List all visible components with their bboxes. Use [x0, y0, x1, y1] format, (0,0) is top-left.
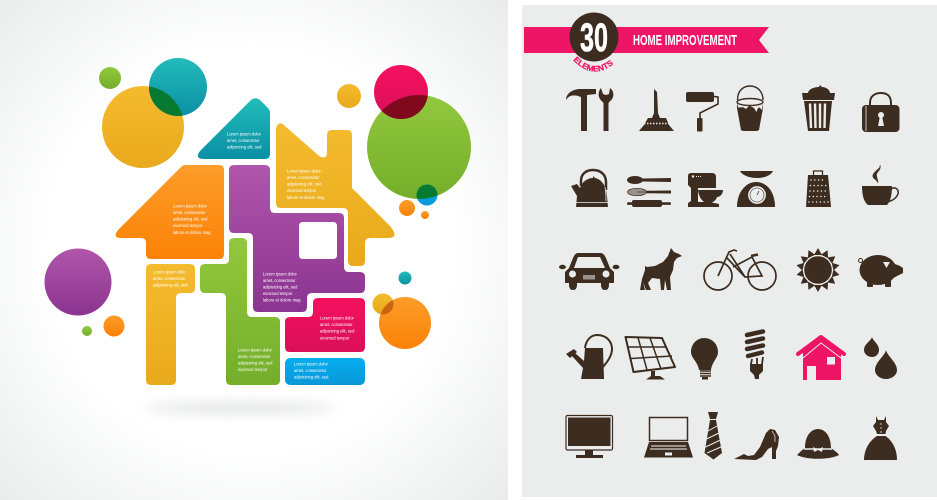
panel: green piece: adipisicing elit, sed [238, 360, 273, 366]
icon: energy saving bulb [747, 332, 763, 379]
panel: orange left roof piece: eiusmod tempor [173, 223, 203, 228]
panel: house infographic background [0, 0, 508, 500]
panel: teal roof piece: amet, consectetur [227, 138, 260, 143]
ribbon banner: HOME IMPROVEMENT [633, 32, 737, 49]
panel: purple piece with window: adipisicing elit, sed [263, 284, 298, 290]
icon: monitor [566, 416, 612, 458]
panel: green piece [200, 238, 280, 385]
panel: orange left roof piece: Lorem ipsum dolor [173, 204, 208, 208]
icon: wrench [599, 88, 613, 131]
decorative bubbles top left [99, 58, 207, 168]
icon: watering can [566, 335, 612, 379]
icon: solar panel [626, 337, 675, 380]
panel: teal roof piece: adipisicing elit, sed [227, 144, 262, 150]
panel: blue piece [285, 358, 365, 385]
icon: laptop [644, 418, 693, 458]
panel: green piece: eiusmod tempor [238, 367, 268, 372]
panel: pink piece: amet, consectetur [320, 322, 353, 327]
panel: orange left roof piece: adipisicing elit, sed [173, 216, 208, 222]
panel: yellow left wall piece: amet, consectetur [153, 276, 186, 281]
icon: sun [796, 248, 840, 292]
icon: dog [640, 248, 682, 290]
icon: necktie [704, 412, 722, 460]
icon: piggy bank [858, 255, 903, 287]
icon: broom [639, 89, 674, 131]
decorative bubbles bottom right [372, 272, 431, 349]
panel: pink piece: Lorem ipsum dolor [320, 316, 355, 320]
badge: 30 elements: ELEMENTS [573, 56, 613, 72]
panel: orange left roof piece: amet, consectetur [173, 210, 206, 215]
panel: yellow left wall piece: adipisicing elit, sed [153, 282, 188, 288]
icon: high heel shoe [734, 429, 779, 460]
panel: blue piece: amet, consectetur [294, 368, 327, 373]
decorative bubbles top right [337, 65, 471, 219]
panel: yellow right roof piece: adipisicing elit, sed [287, 182, 322, 186]
decorative bubbles left [44, 248, 124, 336]
icon: light bulb [691, 338, 718, 380]
icon: stand mixer [688, 173, 723, 207]
panel: orange left roof piece [116, 165, 224, 259]
panel: purple piece with window: eiusmod tempor [263, 291, 293, 296]
icon: kitchen utensils [627, 176, 671, 207]
icon: house (highlighted pink) [798, 337, 844, 380]
icon: dress [864, 416, 897, 460]
icon: kitchen scale [737, 171, 775, 207]
icon: hat [797, 429, 839, 459]
panel: purple piece with window: Lorem ipsum dolor [263, 272, 298, 276]
panel: teal roof piece [198, 98, 270, 159]
panel: yellow right roof piece: amet, consectetur [287, 175, 320, 180]
panel: purple piece with window [229, 165, 365, 312]
panel: yellow right roof piece: eiusmod tempor [287, 188, 317, 193]
panel: teal roof piece: Lorem ipsum dolor [227, 132, 262, 136]
badge: 30 elements: 30 [580, 16, 608, 60]
icon: water drops [864, 337, 897, 379]
panel: yellow right roof piece: Lorem ipsum dolor [287, 168, 322, 174]
icon: bicycle [704, 250, 776, 290]
icon: padlock [862, 93, 900, 132]
ribbon banner [524, 27, 769, 53]
panel: yellow right roof piece: labore et dolore mag [287, 195, 325, 200]
icon: hammer [566, 89, 596, 131]
house shadow [145, 403, 335, 413]
panel: green piece: Lorem ipsum dolor [238, 348, 273, 352]
badge: 30 elements [570, 12, 618, 72]
panel: pink piece: adipisicing elit, sed [320, 328, 355, 334]
panel: yellow left wall piece: Lorem ipsum dolo [153, 270, 186, 274]
panel: pink piece [285, 298, 365, 352]
icon: kettle [571, 170, 608, 207]
panel: orange left roof piece: labore et dolore mag [173, 230, 211, 235]
panel: blue piece: adipisicing elit, sed [294, 374, 329, 380]
icon: coffee cup [862, 165, 898, 205]
panel: yellow left wall piece [146, 264, 195, 385]
panel: purple piece with window: labore et dolore mag [263, 298, 301, 302]
panel: pink piece: eiusmod tempor [320, 336, 350, 340]
panel: blue piece: Lorem ipsum dolor [294, 362, 329, 366]
icon: paint bucket [737, 86, 763, 131]
panel: purple piece with window: amet, consectetur [263, 278, 296, 283]
icon: cheese grater [806, 171, 831, 207]
panel: green piece: amet, consectetur [238, 354, 271, 359]
icon: car [559, 253, 620, 290]
panel: icons background [522, 5, 937, 497]
panel: yellow right roof piece [276, 123, 395, 266]
icon: trash can [802, 85, 835, 131]
icon: paint roller [686, 92, 718, 132]
